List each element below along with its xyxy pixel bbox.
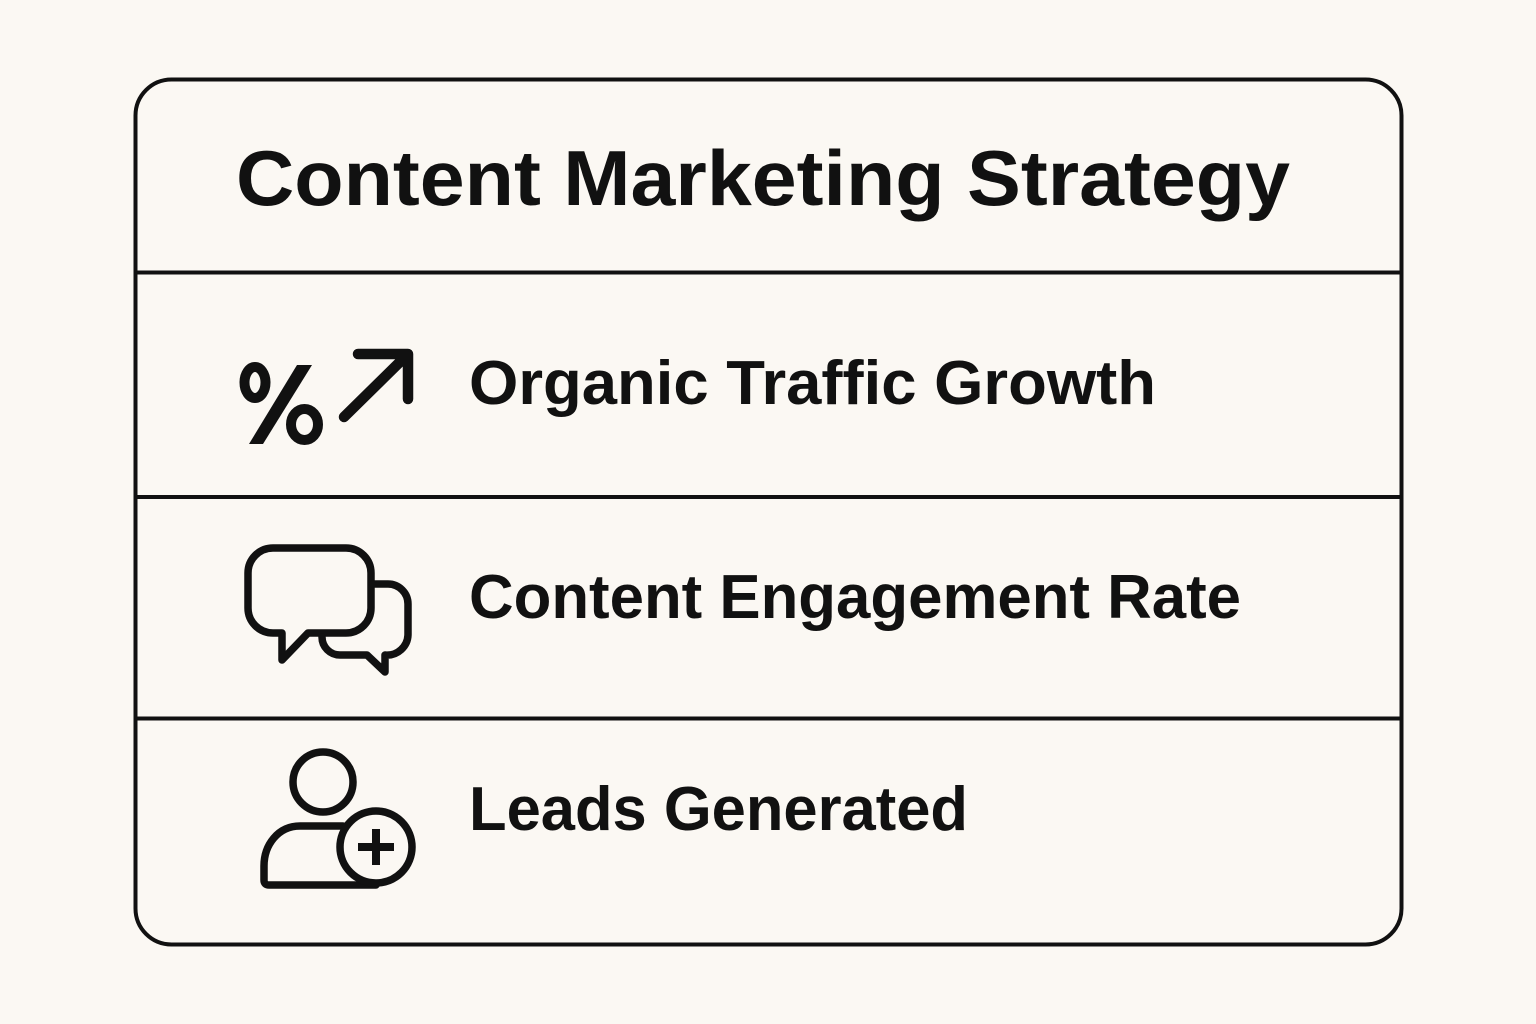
icon: percent with upward arrow [244,354,408,444]
icon: chat bubbles [248,548,408,672]
label: organic traffic growth: Organic Traffic Growth [469,349,1156,418]
label: content engagement rate: Content Engagement Rate [469,563,1241,632]
label: leads generated: Leads Generated [469,775,968,844]
title: Content Marketing Strategy [236,134,1290,222]
panel: strategy card [136,80,1402,944]
icon: person with plus [264,752,412,885]
